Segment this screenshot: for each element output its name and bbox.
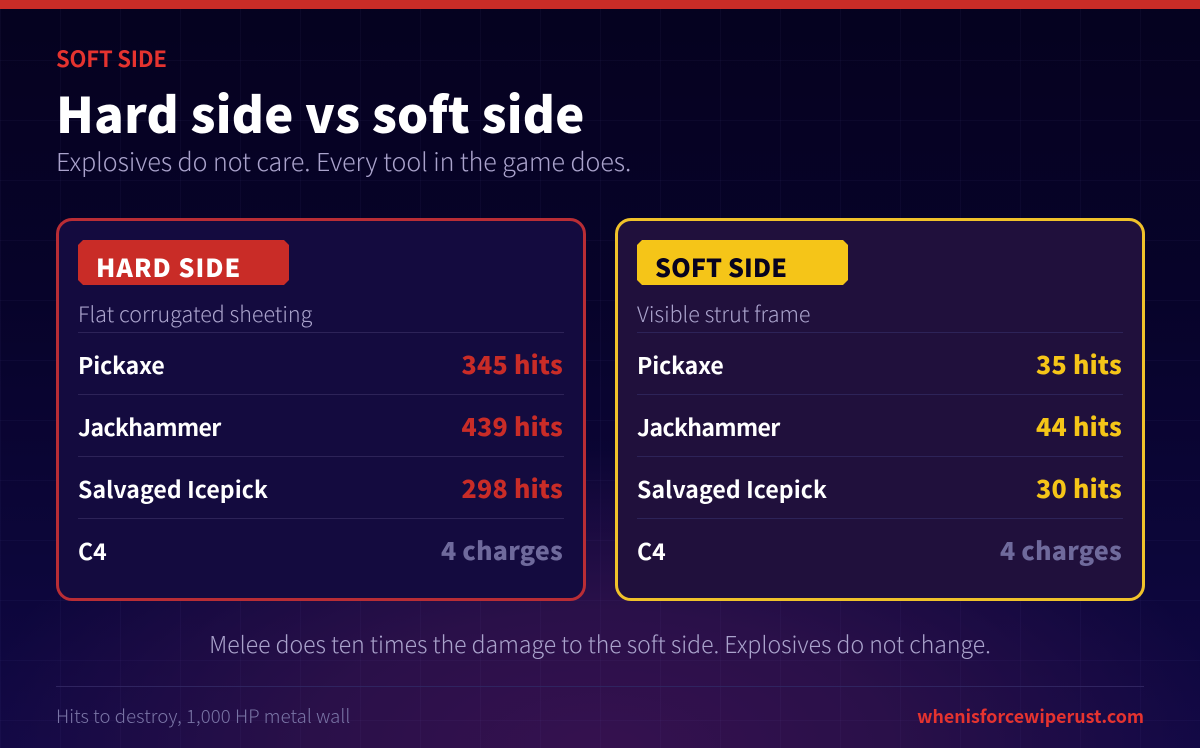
row: C4: 4 charges (441, 532, 563, 568)
row: C4: C4 (637, 533, 666, 567)
row: pickaxe: 35 hits (1036, 346, 1122, 382)
title: Hard side vs soft side (56, 77, 585, 148)
badge: hard side: HARD SIDE (96, 248, 241, 284)
panel: soft side (615, 218, 1145, 601)
row: salvaged icepick (78, 456, 564, 518)
row: jackhammer: 439 hits (462, 408, 563, 444)
row: jackhammer: 44 hits (1036, 408, 1122, 444)
takeaway note: Melee does ten times the damage to the soft side. Explosives do not change. (209, 626, 991, 660)
eyebrow label: SOFT SIDE (56, 42, 167, 74)
panel description: Visible strut frame (637, 298, 810, 329)
row: jackhammer: Jackhammer (637, 409, 780, 443)
row: pickaxe: Pickaxe (637, 347, 724, 381)
footer note: Hits to destroy, 1,000 HP metal wall (56, 703, 350, 729)
row: pickaxe: 345 hits (462, 346, 563, 382)
panel: hard side (56, 218, 586, 601)
subtitle: Explosives do not care. Every tool in the game does. (56, 143, 631, 179)
row: jackhammer: Jackhammer (78, 409, 221, 443)
badge: soft side (637, 240, 848, 285)
row: C4: C4 (78, 533, 107, 567)
footer source: whenisforcewiperust.com (917, 703, 1144, 729)
row: salvaged icepick: Salvaged Icepick (637, 471, 827, 505)
top accent bar (0, 0, 1200, 9)
row: C4: 4 charges (1000, 532, 1122, 568)
row: pickaxe (637, 332, 1123, 394)
row: pickaxe: Pickaxe (78, 347, 165, 381)
row: C4 (637, 518, 1123, 580)
row: jackhammer (78, 394, 564, 456)
badge: soft side: SOFT SIDE (655, 248, 787, 284)
row: salvaged icepick (637, 456, 1123, 518)
row: jackhammer (637, 394, 1123, 456)
row: salvaged icepick: 30 hits (1036, 470, 1122, 506)
row: salvaged icepick: 298 hits (462, 470, 563, 506)
panel description: Flat corrugated sheeting (78, 298, 312, 329)
row: pickaxe (78, 332, 564, 394)
row: C4 (78, 518, 564, 580)
badge: hard side (78, 240, 289, 285)
row: salvaged icepick: Salvaged Icepick (78, 471, 268, 505)
